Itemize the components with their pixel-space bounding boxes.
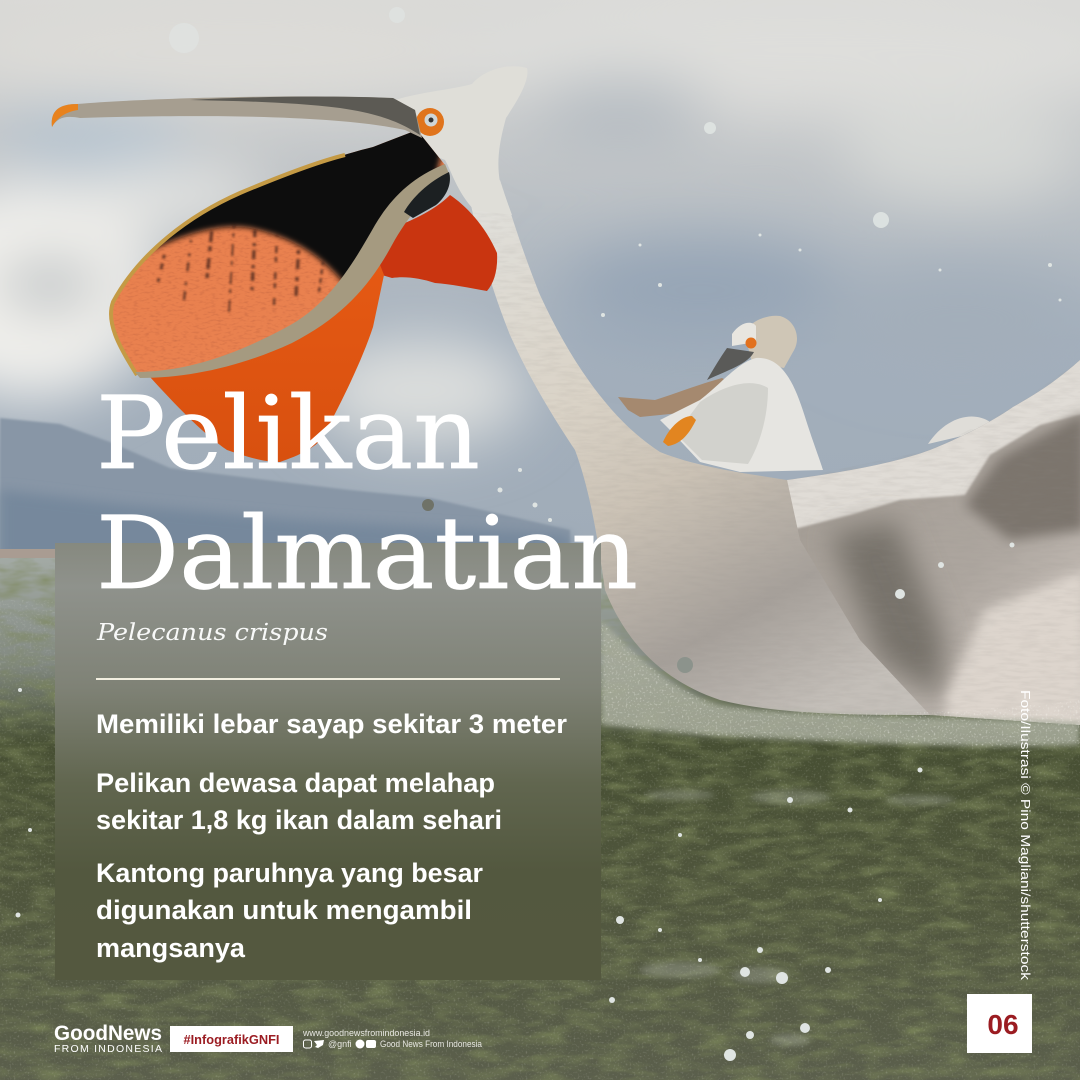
social media links — [302, 1028, 482, 1049]
hashtag badge — [170, 1026, 293, 1052]
title: Dalmatian — [96, 495, 638, 612]
photo credit: Foto/Ilustrasi © Pino Magliani/shutterstock — [1018, 690, 1033, 981]
social media links: Good News From Indonesia — [380, 1039, 482, 1049]
inside of mouth — [113, 132, 444, 375]
fact: pouch use: Kantong paruhnya yang besar — [96, 858, 483, 888]
illustration: main pelican — [52, 66, 1080, 730]
logo: GoodNews From Indonesia: FROM INDONESIA — [54, 1043, 162, 1055]
hashtag badge: #InfografikGNFI — [184, 1032, 280, 1047]
title — [96, 375, 638, 612]
neck and body — [470, 180, 970, 715]
fact: pouch use: digunakan untuk mengambil — [96, 895, 472, 925]
throat — [372, 195, 497, 291]
social media links: www.goodnewsfromindonesia.id — [302, 1028, 430, 1038]
social media links: @gnfi — [328, 1039, 352, 1049]
fact: pouch use — [96, 858, 483, 963]
fact: daily food intake: Pelikan dewasa dapat melahap — [96, 768, 495, 798]
illustration: background pelican — [618, 316, 990, 472]
page number — [967, 994, 1032, 1053]
lower pouch — [150, 247, 384, 462]
fact: daily food intake: sekitar 1,8 kg ikan dalam sehari — [96, 805, 502, 835]
scientific name: Pelecanus crispus — [96, 620, 328, 646]
fact: wingspan: Memiliki lebar sayap sekitar 3 meter — [96, 709, 567, 739]
wing — [787, 360, 1080, 725]
logo: GoodNews From Indonesia — [54, 1022, 162, 1055]
pouch rim — [111, 155, 345, 375]
title: Pelikan — [96, 375, 480, 492]
fact: daily food intake — [96, 768, 502, 835]
page number: 06 — [987, 1009, 1019, 1040]
info panel background — [55, 543, 601, 980]
logo: GoodNews From Indonesia: GoodNews — [54, 1022, 162, 1045]
eye — [416, 108, 444, 136]
head with crest — [395, 66, 527, 215]
divider line — [96, 678, 560, 680]
upper beak — [52, 96, 422, 138]
feather texture — [492, 227, 1068, 708]
fact: pouch use: mangsanya — [96, 933, 246, 963]
